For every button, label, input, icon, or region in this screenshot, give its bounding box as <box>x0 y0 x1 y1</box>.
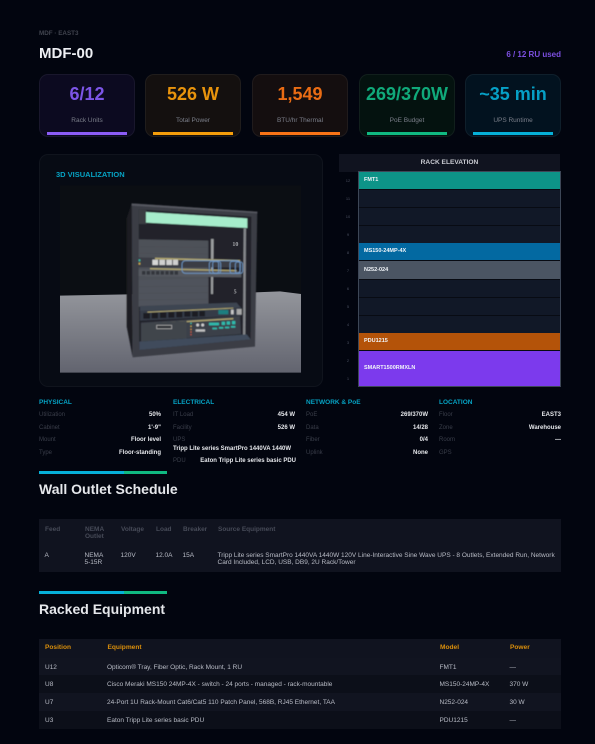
table row: feed A: Tripp Lite series SmartPro 1440VA 1440W 120V Line-Interactive Sine Wave UPS - 8 Outlets, Extended Run, Network <box>218 552 555 558</box>
KPI card: rack units: 6/12 <box>69 84 105 104</box>
specs: electrical: IT Load <box>173 412 193 418</box>
specs: location: GPS <box>439 450 452 456</box>
row: U8: MS150-24MP-4X <box>440 680 489 688</box>
table row: feed A: A <box>44 552 49 558</box>
table header: Feed <box>45 526 60 533</box>
specs: physical: Floor level <box>131 437 161 443</box>
row: U12: FMT1 <box>440 664 456 670</box>
row: U3: PDU1215 <box>440 716 468 724</box>
title: MDF-00 <box>39 44 93 62</box>
specs: location: EAST3 <box>542 412 561 418</box>
rack unit: FMT1 <box>359 172 560 189</box>
row: U7 <box>39 693 561 711</box>
table header: Outlet <box>85 533 104 540</box>
specs: electrical: 454 W <box>278 412 295 418</box>
table header: Breaker <box>183 526 207 533</box>
KPI card: PoE budget <box>359 74 455 137</box>
table row: feed A: 15A <box>182 552 194 558</box>
row: U12: U12 <box>45 664 57 670</box>
specs: physical: Utilization <box>39 412 65 418</box>
text: 2 <box>347 358 349 363</box>
heading: racked equipment: Racked Equipment <box>39 601 165 617</box>
specs: electrical: Facility <box>173 425 192 431</box>
specs: network and PoE <box>306 399 428 456</box>
rack unit: SMART1500RMXLN <box>359 351 560 386</box>
specs: location: LOCATION <box>439 399 472 406</box>
specs: physical <box>39 399 161 456</box>
rack unit: FMT1: FMT1 <box>364 177 378 183</box>
rack elevation diagram <box>358 171 561 387</box>
text: 3 <box>347 340 349 345</box>
row: U12: — <box>510 664 516 670</box>
KPI card: UPS runtime: ~35 min <box>479 84 547 104</box>
table row: feed A: Card Included, LCD, USB, DB9, 2U Rack/Tower <box>218 558 356 566</box>
specs: physical: 50% <box>149 412 161 418</box>
specs: network and PoE: Data <box>306 425 319 431</box>
text: 9 <box>347 232 349 237</box>
table row: feed A: 5-15R <box>84 558 102 566</box>
row: U12 <box>39 658 561 675</box>
specs: electrical <box>173 399 296 464</box>
KPI card: total power: Total Power <box>176 116 210 124</box>
row: U8: 370 W <box>510 680 528 688</box>
rack unit: PDU1215: PDU1215 <box>364 338 388 344</box>
specs: electrical: ELECTRICAL <box>173 399 214 406</box>
table header: NEMA <box>85 526 104 533</box>
3D rack render: 10 <box>232 242 238 248</box>
specs: network and PoE: 0/4 <box>420 437 428 443</box>
specs: network and PoE: Uplink <box>306 450 323 456</box>
specs: network and PoE: 14/28 <box>413 425 428 431</box>
specs: physical: PHYSICAL <box>39 399 72 406</box>
text: 11 <box>346 196 350 201</box>
KPI card: thermal: BTU/hr Thermal <box>277 116 323 124</box>
row: U7: 24-Port 1U Rack-Mount Cat6/Cat5 110 Patch Panel, 568B, RJ45 Ethernet, TAA <box>107 698 335 706</box>
row: U8 <box>39 675 561 693</box>
table header: Load <box>156 526 172 533</box>
table row: feed A: 12.0A <box>156 552 172 558</box>
row: U7: N252-024 <box>440 698 468 706</box>
table header: Source Equipment <box>218 526 275 533</box>
text: 8 <box>347 250 349 255</box>
specs: network and PoE: None <box>413 450 428 456</box>
KPI card: UPS runtime: UPS Runtime <box>493 116 533 124</box>
table header: Voltage <box>121 526 144 533</box>
specs: electrical: UPS <box>173 437 185 443</box>
rack unit: N252-024 <box>359 261 560 279</box>
text: 6 <box>347 286 349 291</box>
text: 5 <box>347 304 349 309</box>
rack unit: MS150-24MP-4X <box>359 243 560 260</box>
panel: rack elevation header: RACK ELEVATION <box>421 159 478 166</box>
table header: Model <box>440 644 459 651</box>
row: U7: 30 W <box>510 698 525 706</box>
specs: electrical: Eaton Tripp Lite series basic PDU <box>200 458 296 464</box>
text: 4 <box>347 322 349 327</box>
3D visualization heading: 3D VISUALIZATION <box>56 170 125 179</box>
row: U7: U7 <box>45 698 53 706</box>
KPI card: rack units: Rack Units <box>71 116 103 124</box>
specs: location: — <box>555 437 561 443</box>
KPI card: rack units <box>39 74 135 137</box>
text: 10 <box>346 214 350 219</box>
specs: network and PoE: PoE <box>306 412 317 418</box>
specs: location: Zone <box>439 425 453 431</box>
panel: 3D visualization <box>39 154 323 387</box>
KPI card: total power <box>145 74 241 137</box>
row: U12: Opticom® Tray, Fiber Optic, Rack Mount, 1 RU <box>107 664 242 670</box>
KPI card: UPS runtime <box>465 74 561 137</box>
3D rack render <box>60 202 301 373</box>
table header: Equipment <box>108 644 142 651</box>
KPI card: PoE budget: PoE Budget <box>390 116 424 124</box>
specs: network and PoE: Fiber <box>306 437 320 443</box>
text: 7 <box>347 268 349 273</box>
table: racked equipment <box>39 639 561 729</box>
row: U3: U3 <box>45 716 53 724</box>
rack unit: SMART1500RMXLN: SMART1500RMXLN <box>364 365 415 371</box>
rack unit: MS150-24MP-4X: MS150-24MP-4X <box>364 248 406 254</box>
KPI card: thermal <box>252 74 348 137</box>
specs: physical: Cabinet <box>39 425 60 431</box>
KPI card: total power: 526 W <box>167 84 219 104</box>
table header <box>45 526 276 540</box>
specs: electrical: Tripp Lite series SmartPro 1440VA 1440W <box>173 446 291 452</box>
3D rack render: 5 <box>234 290 237 296</box>
rack unit: PDU1215 <box>359 333 560 350</box>
specs: location: Warehouse <box>529 425 561 431</box>
row: U3 <box>39 711 561 729</box>
text: 12 <box>346 178 350 183</box>
specs: network and PoE: NETWORK & PoE <box>306 399 361 406</box>
specs: electrical: 526 W <box>278 425 295 431</box>
table header: Power <box>510 644 530 651</box>
rack unit: N252-024: N252-024 <box>364 267 388 273</box>
specs: physical: Floor-standing <box>119 450 161 456</box>
table row: feed A <box>44 552 555 566</box>
specs: location <box>439 399 561 456</box>
text: 1 <box>347 376 349 381</box>
heading: wall outlet schedule: Wall Outlet Schedule <box>39 481 178 497</box>
specs: location: Room <box>439 437 455 443</box>
row: U3: — <box>510 716 516 724</box>
table row: feed A: 120V <box>120 552 136 558</box>
row: U8: U8 <box>45 680 53 688</box>
KPI card: PoE budget: 269/370W <box>366 84 448 104</box>
specs: physical: 1'-9" <box>148 425 161 431</box>
specs: physical: Mount <box>39 437 56 443</box>
table: wall outlet schedule <box>39 519 561 572</box>
specs: network and PoE: 269/370W <box>401 412 428 418</box>
row: U3: Eaton Tripp Lite series basic PDU <box>107 716 204 724</box>
table row: feed A: NEMA <box>84 552 103 558</box>
specs: physical: Type <box>39 450 52 456</box>
table header <box>45 644 530 651</box>
KPI card: thermal: 1,549 <box>277 84 323 104</box>
specs: location: Floor <box>439 412 453 418</box>
row: U8: Cisco Meraki MS150 24MP-4X - switch - 24 ports - managed - rack-mountable <box>107 680 332 688</box>
rack frame <box>358 171 561 387</box>
breadcrumb: MDF · EAST3 <box>39 30 79 37</box>
specs: electrical: PDU <box>173 458 186 464</box>
panel: rack elevation header <box>339 154 560 172</box>
rack units used label: 6 / 12 RU used <box>506 50 561 59</box>
table header: Position <box>45 644 71 651</box>
